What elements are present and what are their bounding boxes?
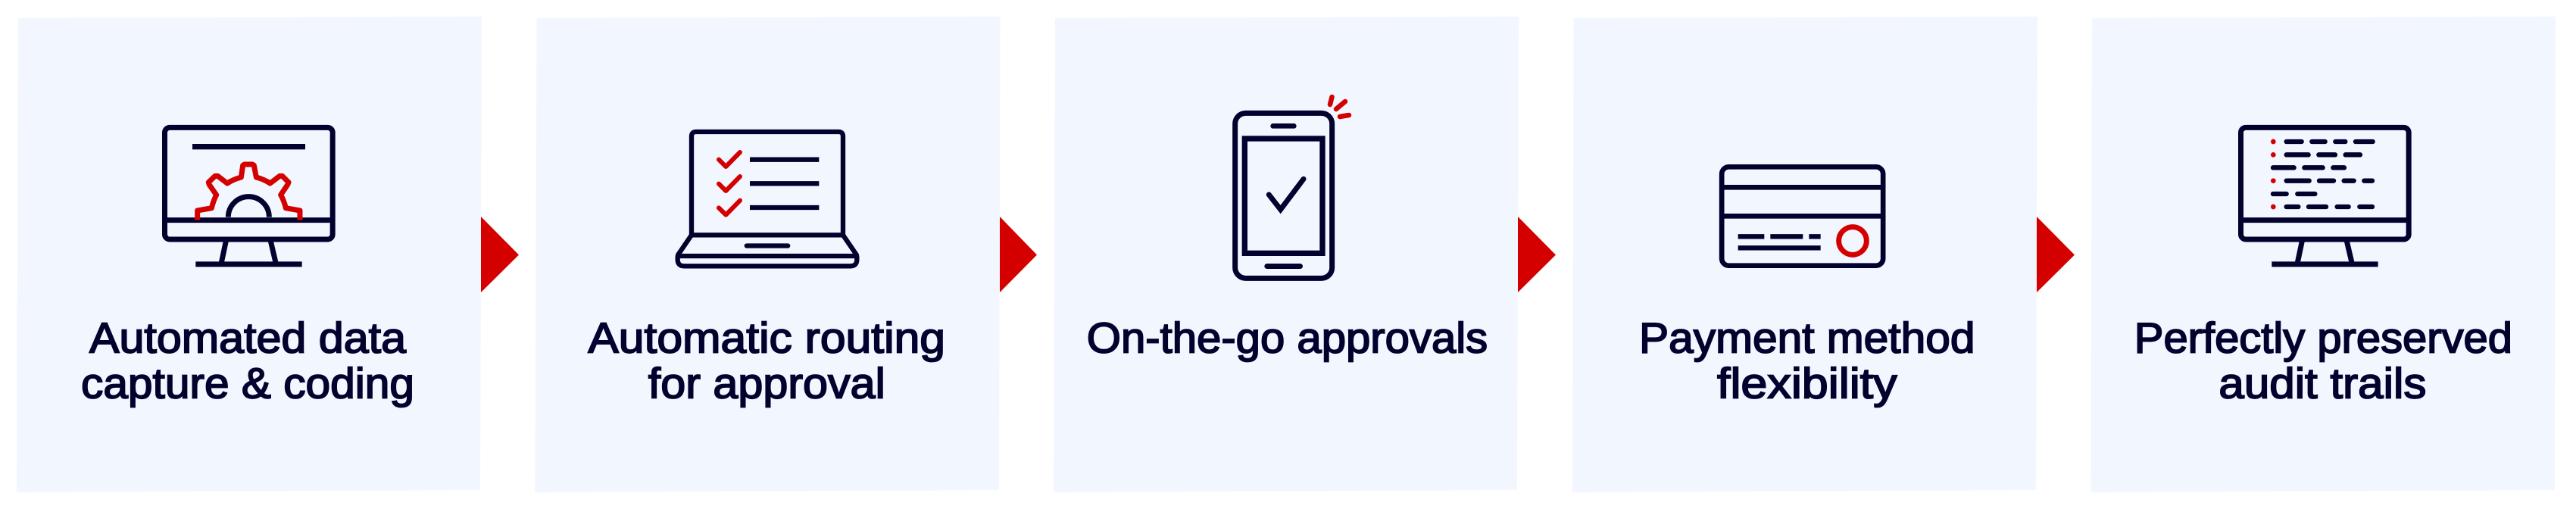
arrow 1 — [481, 217, 519, 292]
heading: automatic routing for approval — [588, 314, 945, 408]
panel: automated data capture and coding — [17, 17, 482, 492]
panel background 1 — [17, 17, 482, 492]
heading: payment method flexibility: Payment method — [1639, 314, 1975, 362]
heading: on-the-go approvals: On-the-go approvals — [1087, 314, 1488, 362]
heading: automated data capture and coding — [81, 314, 414, 408]
arrow 4 — [2037, 217, 2075, 292]
panel background 4 — [1572, 17, 2037, 492]
panel: perfectly preserved audit trails — [2090, 17, 2556, 492]
heading: automatic routing for approval: Automatic routing — [588, 314, 945, 362]
panel: payment method flexibility — [1572, 17, 2037, 492]
arrow 3 — [1518, 217, 1556, 292]
icon: smartphone with check mark — [1235, 97, 1349, 278]
panel background 2 — [535, 17, 1000, 492]
heading: payment method flexibility: flexibility — [1717, 359, 1897, 408]
icon: payment card — [1719, 167, 1885, 266]
heading: payment method flexibility — [1639, 314, 1975, 408]
icon: monitor with log lines — [2240, 127, 2409, 267]
panel: automatic routing for approval — [535, 17, 1000, 492]
heading: perfectly preserved audit trails: Perfectly preserved — [2134, 314, 2512, 362]
icon: laptop with checklist — [678, 132, 857, 266]
icon: monitor with gear — [164, 127, 333, 267]
arrow 2 — [1000, 217, 1037, 292]
heading: automated data capture and coding: Automated data — [89, 314, 406, 362]
heading: perfectly preserved audit trails: audit trails — [2218, 359, 2426, 408]
panel background 3 — [1054, 17, 1519, 492]
panel background 5 — [2090, 17, 2556, 492]
heading: perfectly preserved audit trails — [2134, 314, 2512, 408]
heading: automated data capture and coding: capture & coding — [81, 359, 414, 408]
heading: automatic routing for approval: for approval — [648, 359, 885, 408]
panel: on-the-go approvals — [1054, 17, 1519, 492]
